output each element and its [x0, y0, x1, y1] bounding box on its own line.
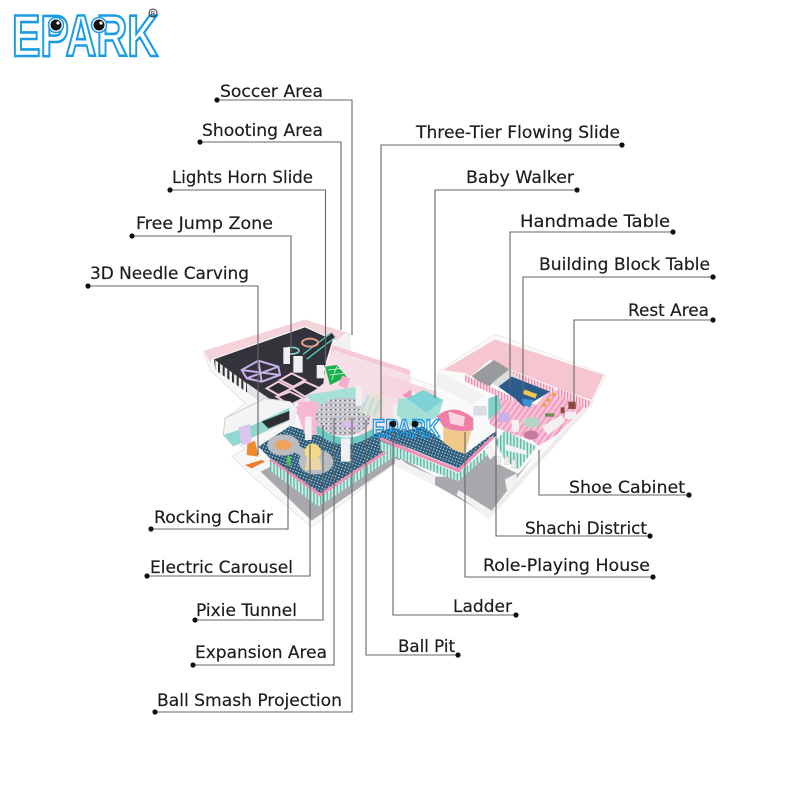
- callout: Ball Pit: [366, 420, 461, 658]
- callout: Ball Smash Projection: Ball Smash Projection: [157, 691, 342, 711]
- callout: Handmade Table: [510, 212, 676, 388]
- callout: Ball Pit: Ball Pit: [398, 637, 455, 657]
- callout: Lights Horn Slide: Lights Horn Slide: [172, 168, 313, 188]
- fence platform: [223, 398, 300, 446]
- handmade table and building blocks: [492, 370, 520, 390]
- callout: Shoe Cabinet: Shoe Cabinet: [569, 478, 685, 498]
- watermark: EPARK logo on the plan: EPARK: [372, 415, 440, 443]
- pink house: [297, 402, 322, 435]
- callout: Shoe Cabinet: [539, 450, 692, 498]
- electric carousel: [305, 444, 321, 460]
- pink floor border: [270, 443, 410, 495]
- black and white front wall: [214, 359, 247, 393]
- white wall block: [438, 372, 485, 405]
- three-tier flowing slide: [358, 392, 387, 418]
- logo: EPARK: R: [151, 10, 156, 18]
- trampoline grids: [267, 373, 320, 405]
- callout: Pixie Tunnel: Pixie Tunnel: [196, 601, 297, 621]
- purple needle carving frame: [242, 361, 280, 382]
- white pillars: [283, 347, 324, 378]
- callout: Three-Tier Flowing Slide: Three-Tier Flowing Slide: [415, 123, 620, 143]
- callout: Baby Walker: Baby Walker: [466, 168, 574, 188]
- callout: Soccer Area: [214, 82, 352, 335]
- pink walls: [443, 339, 603, 400]
- callout: Lights Horn Slide: [167, 168, 326, 365]
- callout: Shachi District: Shachi District: [525, 519, 647, 539]
- callout: Shooting Area: Shooting Area: [202, 121, 323, 141]
- callout: Handmade Table: Handmade Table: [520, 212, 670, 232]
- main navy dotted floor: [258, 426, 410, 494]
- callout: 3D Needle Carving: 3D Needle Carving: [90, 264, 249, 284]
- ball pit: [316, 397, 371, 436]
- pink back wall: [204, 320, 347, 363]
- teal soft-play: [307, 387, 360, 415]
- grey room floor: [472, 360, 509, 388]
- callout: Rocking Chair: [148, 462, 288, 532]
- teal fence: [270, 445, 410, 507]
- pink corridor continuation: [380, 373, 438, 407]
- callout: Building Block Table: [523, 255, 716, 395]
- pink arch: [382, 380, 412, 400]
- callout: Ladder: [393, 440, 519, 618]
- outer right wall: [487, 402, 593, 518]
- callout: Role-Playing House: [465, 432, 656, 580]
- teal fence: [380, 441, 490, 481]
- callout: Three-Tier Flowing Slide: [381, 123, 625, 420]
- callout: Shooting Area: [197, 121, 341, 330]
- role-playing house: [443, 427, 472, 453]
- black jump floor: [214, 327, 333, 403]
- callout: Rest Area: Rest Area: [628, 301, 709, 321]
- logo: EPARK: EPARK: [12, 4, 158, 69]
- outer wall and ground slab: [203, 320, 410, 527]
- rocking chair: [247, 441, 258, 457]
- carousel track: [267, 434, 333, 474]
- grey low wall: [247, 383, 276, 408]
- green figure: [287, 457, 291, 466]
- floor slab: right wing base: [380, 334, 606, 518]
- lights horn slide: [305, 335, 333, 357]
- rest area furniture: [561, 402, 576, 413]
- white corner wall: [332, 334, 350, 353]
- callout: Expansion Area: Expansion Area: [195, 643, 327, 663]
- callout: Expansion Area: [190, 418, 334, 668]
- white floor blocks: [395, 445, 517, 517]
- callout: Pixie Tunnel: [192, 425, 323, 623]
- centre play floor, pale pink: [298, 350, 410, 437]
- pink zigzag floor: [488, 388, 590, 446]
- pink track edge: [380, 437, 493, 471]
- navy floor: [380, 427, 497, 468]
- floor plan: right wing: [380, 339, 603, 517]
- striped fences: [465, 375, 513, 403]
- shoe cabinet room: [495, 431, 537, 469]
- callout: Ball Smash Projection: [152, 418, 352, 715]
- foreground pillars: [289, 386, 401, 462]
- callout: 3D Needle Carving: [85, 264, 258, 455]
- soccer area: [325, 365, 347, 385]
- callout: Rocking Chair: Rocking Chair: [154, 508, 273, 528]
- callout: Role-Playing House: Role-Playing House: [483, 556, 650, 576]
- callout: Ladder: Ladder: [453, 597, 512, 617]
- callout: Electric Carousel: Electric Carousel: [150, 558, 293, 578]
- teal room: [407, 390, 443, 413]
- callout: Free Jump Zone: Free Jump Zone: [136, 214, 273, 234]
- grey expansion area: [261, 451, 403, 521]
- callout: Electric Carousel: [144, 445, 310, 579]
- grey floor: [393, 448, 533, 515]
- callout: Baby Walker: [435, 168, 580, 398]
- callout: Rest Area: [574, 301, 716, 402]
- callout: Shachi District: [496, 395, 653, 539]
- callout: Building Block Table: Building Block Table: [539, 255, 710, 275]
- callout: Free Jump Zone: [129, 214, 291, 352]
- pink corridor wall: [330, 345, 410, 378]
- callout: Soccer Area: Soccer Area: [220, 82, 323, 102]
- floor plan: left wing: [203, 320, 412, 527]
